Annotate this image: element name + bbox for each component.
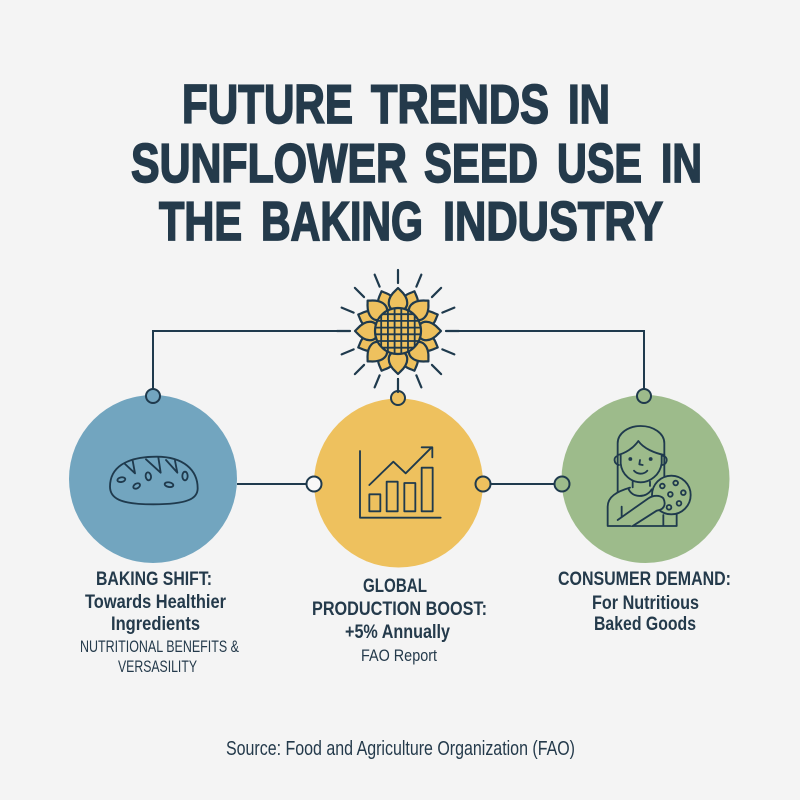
node: production right — [476, 476, 490, 492]
text: baking shift: VERSASILITY — [118, 657, 197, 676]
text: consumer demand: Baked Goods — [594, 614, 696, 635]
title: IN — [568, 73, 610, 135]
infographic canvas — [69, 84, 730, 759]
title: USE — [557, 132, 642, 194]
node: consumer top — [637, 389, 651, 403]
text: baking shift: Towards Healthier — [85, 592, 227, 613]
connector: production to consumer — [490, 483, 555, 485]
panel circle: baking shift — [69, 395, 237, 563]
title: SUNFLOWER — [131, 132, 407, 194]
text: baking shift: NUTRITIONAL BENEFITS & — [80, 637, 239, 656]
title: THE — [159, 190, 242, 252]
title: FUTURE — [182, 73, 353, 135]
title — [131, 73, 702, 252]
icon: person holding cookie — [608, 426, 691, 526]
text: baking shift — [80, 569, 239, 676]
source note: Source: Food and Agriculture Organization (FAO) — [226, 738, 575, 760]
node: baking top — [146, 389, 160, 403]
text: consumer demand: For Nutritious — [592, 593, 699, 614]
text: consumer demand — [558, 569, 731, 635]
text: global production: GLOBAL — [363, 576, 427, 597]
connector: sunflower to baking circle — [153, 331, 350, 390]
title: SEED — [424, 132, 538, 194]
connector: sunflower to consumer circle — [447, 331, 644, 390]
panel circle: global production — [314, 398, 483, 568]
title: BAKING — [261, 190, 423, 252]
text: baking shift: BAKING SHIFT: — [96, 569, 212, 590]
panel circle: consumer demand — [562, 395, 730, 563]
title: IN — [661, 132, 702, 194]
connector: sunflower to production circle — [397, 378, 399, 392]
node: production top — [391, 391, 405, 405]
title: TRENDS — [371, 73, 549, 135]
text: global production — [312, 576, 487, 665]
node: production left — [306, 476, 322, 492]
text: global production: +5% Annually — [345, 622, 450, 643]
text: baking shift: Ingredients — [111, 614, 200, 635]
title: INDUSTRY — [443, 190, 663, 252]
text: global production: PRODUCTION BOOST: — [312, 599, 487, 620]
text: global production: FAO Report — [361, 646, 437, 665]
icon: bread loaf — [110, 457, 198, 504]
text: consumer demand: CONSUMER DEMAND: — [558, 569, 731, 590]
icon: rising bar chart — [360, 447, 441, 518]
icon: sunflower — [337, 270, 459, 392]
node: consumer left — [554, 476, 570, 492]
connector: baking to production — [237, 483, 307, 485]
